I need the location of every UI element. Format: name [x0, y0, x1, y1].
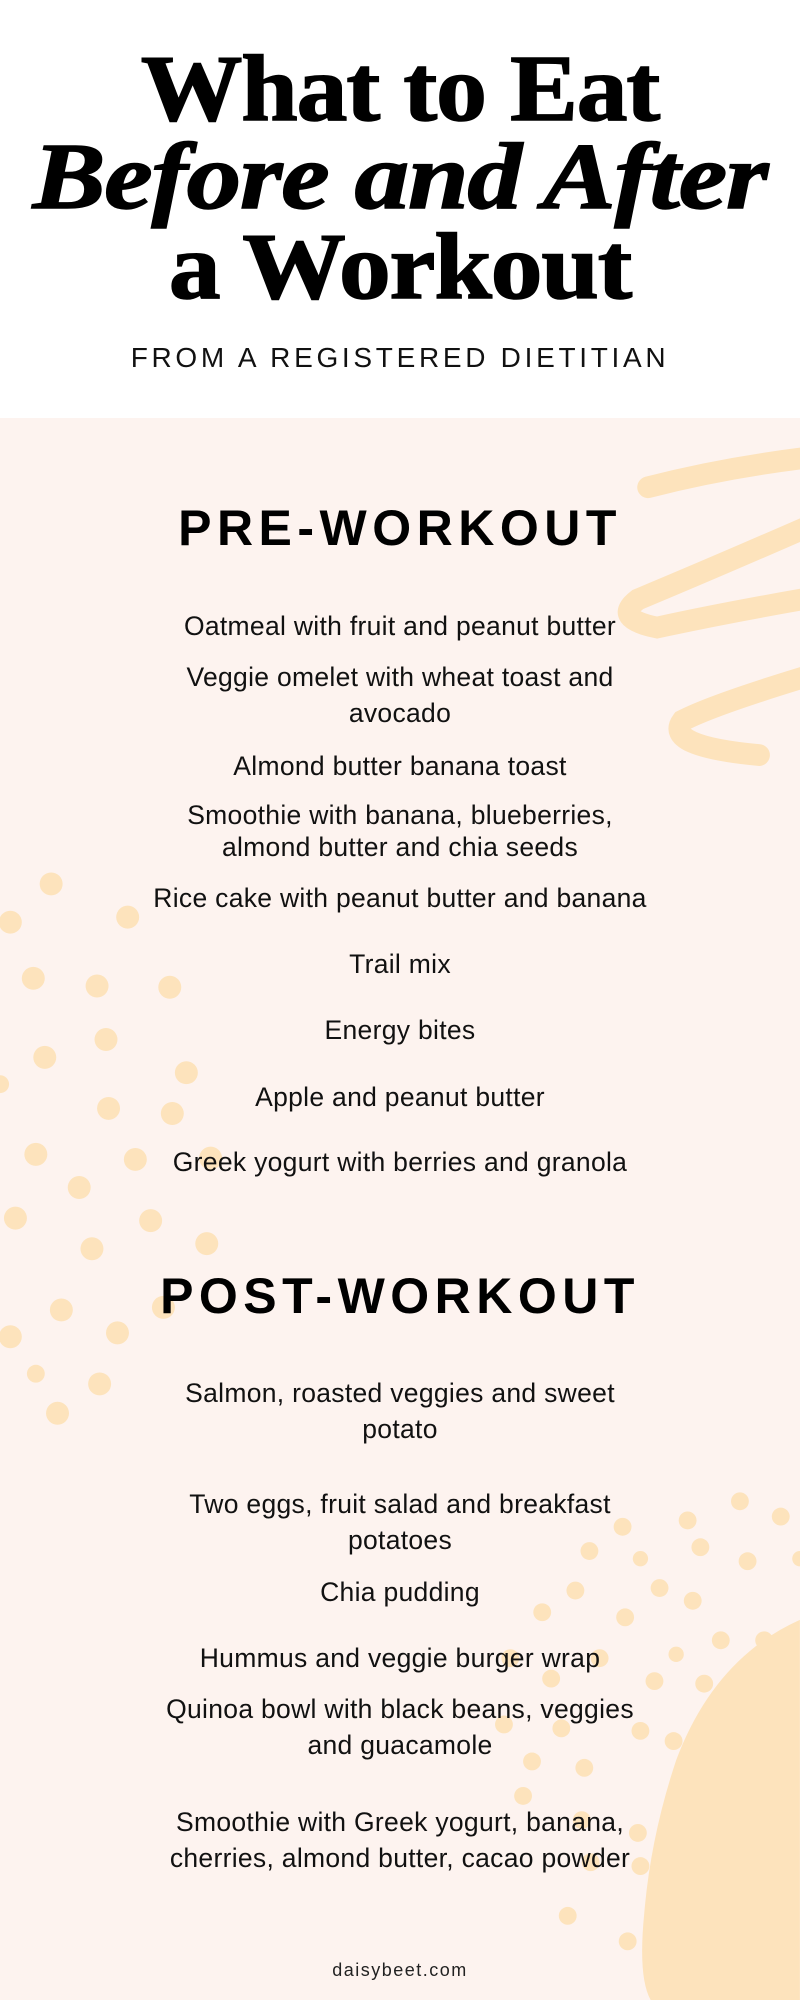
list: pre-workout: Veggie omelet with wheat toast and: [186, 662, 614, 692]
list: post-workout: Hummus and veggie burger wrap: [200, 1643, 600, 1673]
list: post-workout: Two eggs, fruit salad and breakfast: [189, 1489, 611, 1519]
list: pre-workout: almond butter and chia seeds: [222, 832, 578, 862]
heading: pre-workout: PRE-WORKOUT: [178, 500, 622, 556]
title: What to Eat: [141, 37, 659, 141]
list: post-workout: Quinoa bowl with black beans, veggies: [166, 1694, 634, 1724]
list: pre-workout: Trail mix: [349, 949, 451, 979]
list: pre-workout: Almond butter banana toast: [233, 751, 567, 781]
list: pre-workout: Greek yogurt with berries and granola: [173, 1147, 627, 1177]
list: pre-workout: Apple and peanut butter: [255, 1082, 545, 1112]
subtitle: FROM A REGISTERED DIETITIAN: [131, 342, 669, 373]
list: pre-workout: avocado: [349, 698, 451, 728]
list: post-workout: cherries, almond butter, cacao powder: [170, 1843, 630, 1873]
footer: daisybeet.com: [332, 1960, 468, 1980]
list: post-workout: Smoothie with Greek yogurt, banana,: [176, 1807, 624, 1837]
list: pre-workout: Energy bites: [325, 1015, 475, 1045]
list: post-workout: Salmon, roasted veggies and sweet: [185, 1378, 615, 1408]
list: pre-workout: Smoothie with banana, blueberries,: [187, 800, 613, 830]
title: a Workout: [169, 215, 631, 319]
list: post-workout: and guacamole: [307, 1730, 493, 1760]
list: post-workout: [166, 1378, 634, 1873]
list: pre-workout: Rice cake with peanut butter and banana: [153, 883, 647, 913]
list: post-workout: Chia pudding: [320, 1577, 480, 1607]
title: Before and After: [33, 125, 767, 229]
list: pre-workout: Oatmeal with fruit and peanut butter: [184, 611, 616, 641]
list: post-workout: potatoes: [348, 1525, 452, 1555]
title: [30, 37, 770, 319]
list: post-workout: potato: [362, 1414, 438, 1444]
heading: post-workout: POST-WORKOUT: [160, 1268, 640, 1324]
list: pre-workout: [153, 611, 647, 1177]
background panel: [0, 418, 800, 2000]
